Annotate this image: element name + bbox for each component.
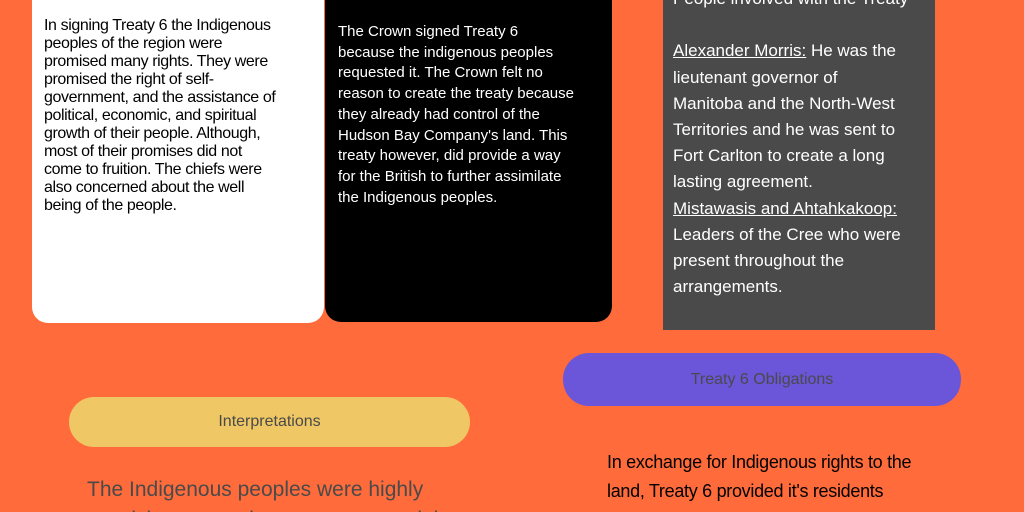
text: rights bbox=[44, 17, 276, 214]
text: obligations: In exchange for Indigenous rights to the bbox=[607, 452, 911, 472]
panel: people involved bbox=[663, 0, 935, 330]
text: crown bbox=[338, 23, 574, 206]
text: rights: promised the right of self- bbox=[44, 71, 214, 88]
text: rights: most of their promises did not bbox=[44, 143, 242, 160]
text: crown: because the indigenous peoples bbox=[338, 44, 553, 61]
pill: Treaty 6 Obligations: Treaty 6 Obligations bbox=[691, 370, 833, 388]
text: obligations bbox=[607, 452, 911, 512]
text: rights: come to fruition. The chiefs were bbox=[44, 161, 262, 178]
text: rights: political, economic, and spiritual bbox=[44, 107, 256, 124]
text: rights: In signing Treaty 6 the Indigenous bbox=[44, 17, 271, 34]
text: crown: requested it. The Crown felt no bbox=[338, 64, 543, 81]
text: people involved: arrangements. bbox=[673, 277, 783, 296]
text: rights: growth of their people. Although, bbox=[44, 125, 260, 142]
panel: black crown bbox=[325, 0, 612, 322]
text: rights: government, and the assistance of bbox=[44, 89, 275, 106]
text: people involved: Alexander Morris: He was the bbox=[673, 41, 896, 60]
text: people involved: Mistawasis and Ahtahkakoop: bbox=[673, 199, 897, 218]
pill: Treaty 6 Obligations bbox=[563, 353, 961, 406]
text: rights: also concerned about the well bbox=[44, 179, 244, 196]
text: people involved: Manitoba and the North-West bbox=[673, 94, 895, 113]
text: people involved: Territories and he was sent to bbox=[673, 120, 895, 139]
text: crown: The Crown signed Treaty 6 bbox=[338, 23, 518, 40]
pill: Interpretations bbox=[69, 397, 470, 447]
text: people involved bbox=[673, 0, 908, 296]
text: people involved: Fort Carlton to create a long bbox=[673, 146, 885, 165]
text: crown: they already had control of the bbox=[338, 106, 540, 123]
text: crown: for the British to further assimilate bbox=[338, 168, 561, 185]
text: people involved: lieutenant governor of bbox=[673, 68, 837, 87]
text: rights: peoples of the region were bbox=[44, 35, 222, 52]
text: people involved: lasting agreement. bbox=[673, 172, 813, 191]
text: rights: promised many rights. They were bbox=[44, 53, 268, 70]
text: people involved: present throughout the bbox=[673, 251, 844, 270]
text: people involved: Leaders of the Cree who were bbox=[673, 225, 901, 244]
pill: Interpretations: Interpretations bbox=[218, 413, 321, 430]
text: rights: being of the people. bbox=[44, 197, 177, 214]
text: obligations: land, Treaty 6 provided it's residents bbox=[607, 481, 883, 501]
panel: white rights bbox=[32, 0, 324, 323]
text: crown: Hudson Bay Company's land. This bbox=[338, 127, 567, 144]
text: interpretations: The Indigenous peoples were highly bbox=[87, 478, 423, 501]
text: crown: the Indigenous peoples. bbox=[338, 189, 497, 206]
text: crown: reason to create the treaty because bbox=[338, 85, 574, 102]
text: crown: treaty however, did provide a way bbox=[338, 147, 561, 164]
text: interpretations bbox=[87, 478, 457, 512]
